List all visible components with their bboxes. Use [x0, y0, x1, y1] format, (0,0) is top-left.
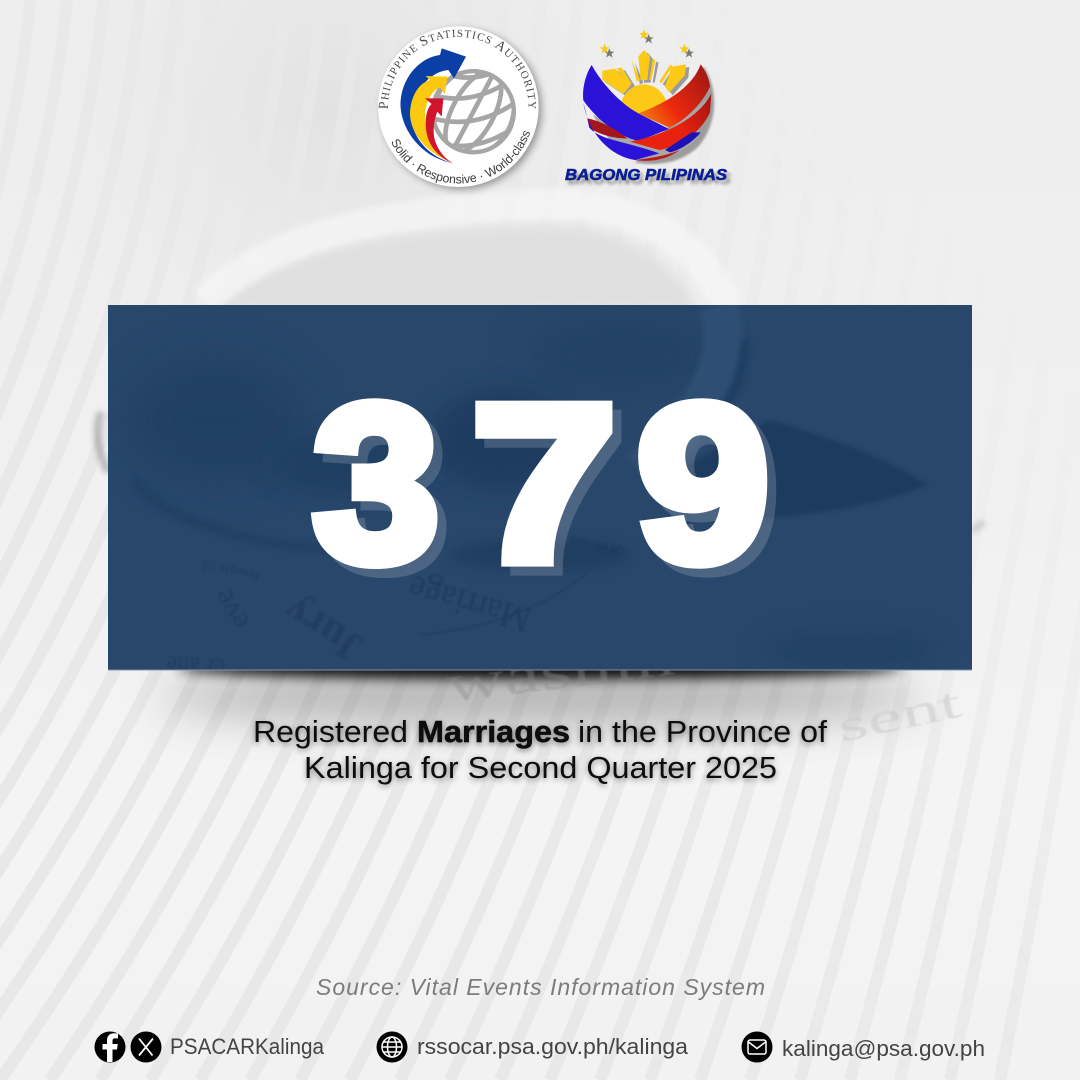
- right red band: [638, 64, 710, 128]
- icon: mail: [742, 1032, 772, 1062]
- seal text: name: PHILIPPINE STATISTICS AUTHORITY: [378, 30, 536, 109]
- caption: Registered: [253, 714, 408, 749]
- blurred wedding ring photo behind the panel: washin: [443, 629, 678, 714]
- caption: in the Province of: [578, 714, 827, 749]
- seal text: motto: Solid · Responsive · World-class: [392, 130, 530, 184]
- blurred wedding ring photo behind the panel: sent: [833, 678, 965, 752]
- stars: [600, 30, 694, 58]
- number: 379: 7: [472, 360, 616, 608]
- panel photo overlay: Jury: [276, 587, 371, 671]
- globe: [431, 69, 516, 154]
- panel: big number: [108, 305, 972, 680]
- number shadow: 9: [646, 368, 778, 616]
- number: 379: [313, 359, 769, 608]
- panel photo overlay: Of blessed: [568, 533, 626, 560]
- caption: Marriages: [417, 714, 570, 749]
- wordmark shadow: BAGONG PILIPINAS: [568, 171, 731, 188]
- icon: globe: [376, 1032, 408, 1062]
- email: kalinga@psa.gov.ph: [782, 1036, 985, 1061]
- lower blue band: [583, 102, 659, 160]
- number shadow: 7: [481, 369, 625, 617]
- red arrow: [425, 98, 453, 163]
- left red band: [587, 118, 627, 138]
- icon: X: [130, 1032, 162, 1062]
- footer: contact row: [94, 1032, 985, 1062]
- number shadow: 3: [322, 368, 448, 617]
- website: rssocar.psa.gov.ph/kalinga: [417, 1034, 689, 1059]
- number: 379: 9: [637, 359, 769, 607]
- panel photo overlay: er ane: [166, 650, 225, 680]
- left blue band: [583, 65, 669, 141]
- bottom red sliver: [635, 150, 680, 161]
- sun: [602, 50, 686, 122]
- blue arrow: [400, 48, 466, 163]
- panel photo overlay: Jewels of: [200, 555, 263, 585]
- number shadow: [322, 368, 778, 617]
- panel photo overlay: [125, 305, 940, 680]
- caption: Kalinga for Second Quarter 2025: [304, 750, 777, 785]
- sun rays shadow: [606, 53, 689, 97]
- panel photo overlay: Marriage: [404, 568, 535, 641]
- bowl shadow: [635, 67, 714, 164]
- yellow arrow: [410, 76, 453, 163]
- social handle: PSACARKalinga: [170, 1034, 325, 1059]
- wordmark: BAGONG PILIPINAS: [565, 167, 727, 184]
- panel photo overlay: eve: [206, 583, 256, 636]
- blurred wedding ring photo behind the panel: [97, 204, 984, 752]
- lower red band: [630, 93, 711, 150]
- grey gap under bands: [593, 97, 710, 160]
- logo: Bagong Pilipinas: [583, 30, 714, 164]
- icon: facebook: [94, 1032, 126, 1062]
- logo: Philippine Statistics Authority seal: [377, 24, 546, 194]
- source note: Source: Vital Events Information System: [316, 974, 765, 1000]
- caption: [253, 714, 827, 785]
- number: 379: 3: [313, 359, 439, 608]
